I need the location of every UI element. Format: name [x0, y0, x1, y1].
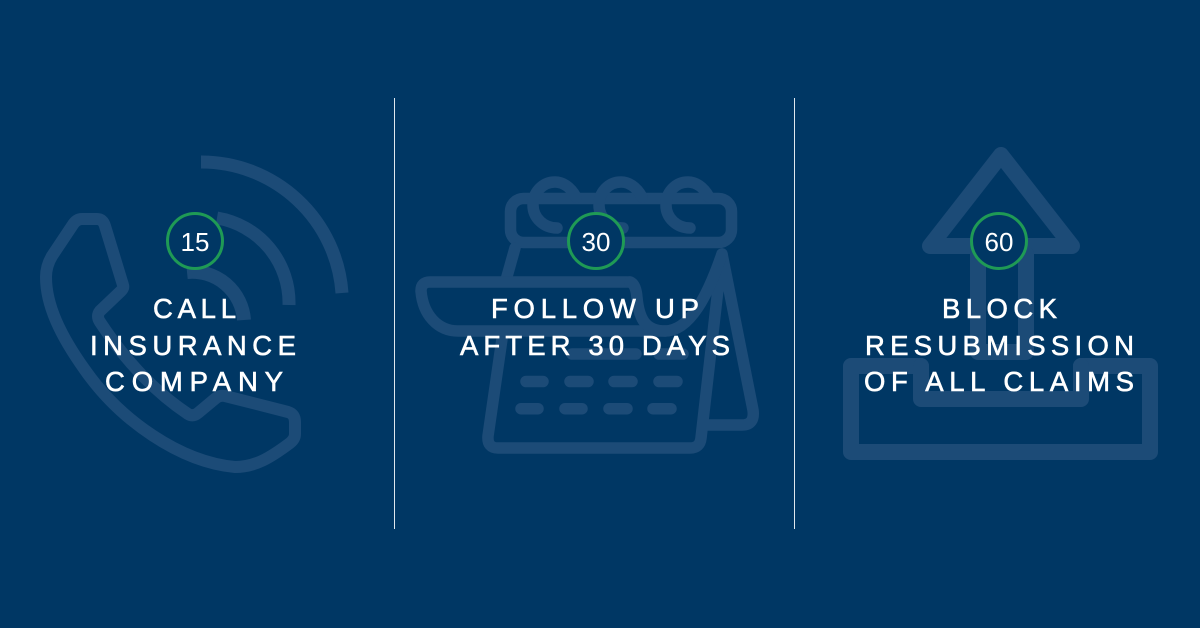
number badge 30 — [568, 214, 624, 268]
divider left — [394, 98, 395, 529]
number badge 15: 15 — [181, 227, 209, 257]
number badge 15 — [168, 214, 222, 268]
heading: follow up after 30 days — [460, 293, 730, 361]
heading: follow up after 30 days: FOLLOW UP — [491, 293, 699, 324]
panel: call insurance company — [46, 162, 342, 467]
divider right — [794, 98, 795, 529]
heading: call insurance company: COMPANY — [105, 366, 283, 397]
icon: desk calendar — [421, 182, 753, 448]
heading: call insurance company: CALL — [153, 293, 236, 324]
panel: block resubmission of all claims — [851, 155, 1150, 452]
heading: block resubmission of all claims — [864, 293, 1134, 397]
panel: follow up after 30 days — [421, 182, 753, 448]
heading: call insurance company — [90, 293, 296, 397]
heading: call insurance company: INSURANCE — [90, 330, 296, 361]
number badge 30: 30 — [582, 227, 610, 257]
heading: block resubmission of all claims: BLOCK — [942, 293, 1058, 324]
number badge 60: 60 — [985, 227, 1013, 257]
icon: telephone with signal arcs — [46, 162, 342, 467]
heading: follow up after 30 days: AFTER 30 DAYS — [460, 330, 730, 361]
heading: block resubmission of all claims: RESUBMISSION — [865, 330, 1134, 361]
heading: block resubmission of all claims: OF ALL CLAIMS — [864, 366, 1134, 397]
number badge 60 — [972, 214, 1026, 268]
icon: upload arrow into tray — [851, 155, 1150, 452]
